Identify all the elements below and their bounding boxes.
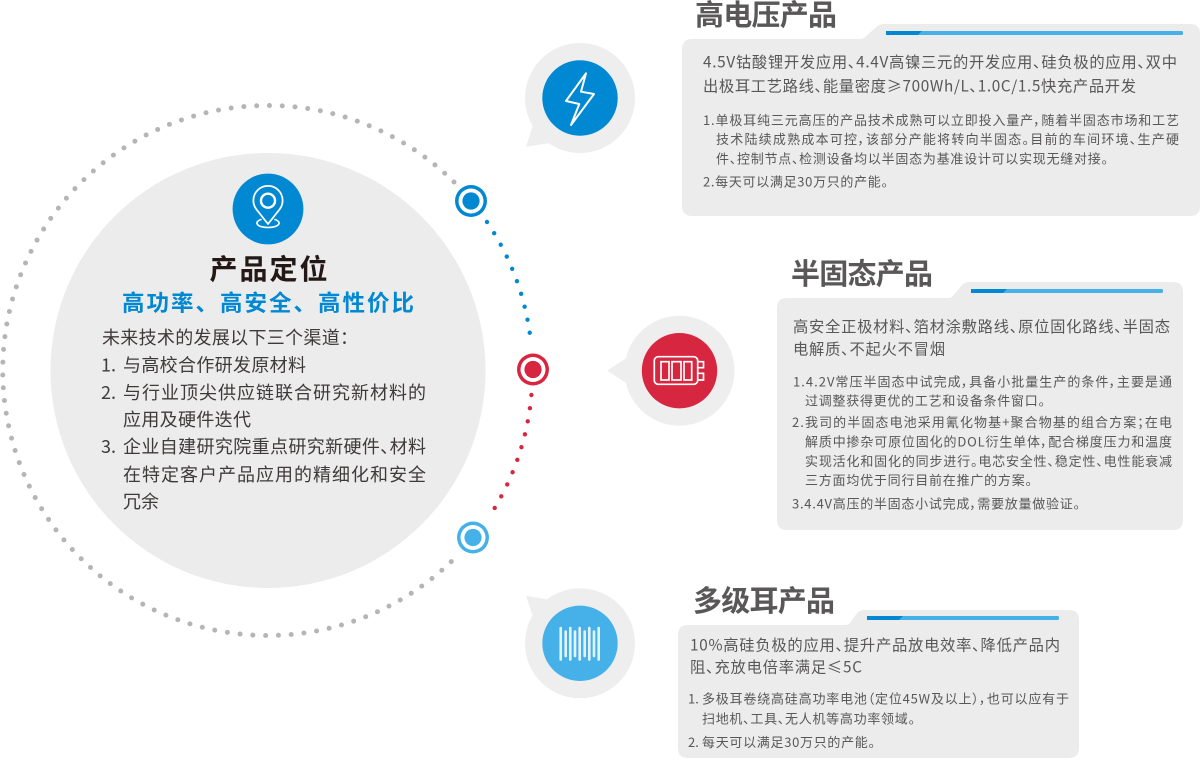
text: details: 多极耳卷绕高硅高功率电池（定位45W及以上），也可以应有于	[702, 688, 1069, 708]
text block: channels: 企业自建研究院重点研究新硬件、材料	[123, 433, 426, 459]
text block: channels: 与行业顶尖供应链联合研究新材料的	[123, 379, 426, 405]
node: blue	[455, 185, 487, 217]
text: details	[688, 688, 1069, 751]
text: summary: 出极耳工艺路线、能量密度≥700Wh/L、1.0C/1.5快充产品开发	[703, 74, 1136, 96]
text: details: 实现活化和固化的同步进行。电芯安全性、稳定性、电性能衰减	[805, 451, 1172, 470]
text block: channels: 与高校合作研发原材料	[123, 352, 306, 378]
text: details: 技术陆续成熟成本可控，该部分产能将转向半固态。目前的车间环境、生产硬	[716, 129, 1179, 148]
text: summary: 4.5V钴酸锂开发应用、4.4V高镍三元的开发应用、硅负极的应用、双中	[703, 50, 1177, 72]
node: light blue	[457, 522, 489, 554]
icon: battery bubble	[607, 316, 734, 426]
text block: channels: 冗余	[123, 488, 159, 514]
panel: semi-solid	[777, 282, 1183, 530]
node: red	[517, 354, 549, 386]
text: summary: 电解质、不起火不冒烟	[793, 338, 945, 360]
text: details: 3.4.4V高压的半固态小试完成，需要放量做验证。	[792, 494, 1080, 512]
panel: high voltage	[682, 24, 1200, 216]
text: summary: 高安全正极材料、箔材涂敷路线、原位固化路线、半固态	[793, 315, 1170, 337]
text: details: 2.我司的半固态电池采用氰化物基+聚合物基的组合方案；在电	[792, 412, 1172, 431]
text: details: 解质中掺杂可原位固化的DOL衍生单体，配合梯度压力和温度	[805, 432, 1172, 450]
text block: channels: 未来技术的发展以下三个渠道：	[102, 324, 349, 350]
text: details: 三方面均优于同行目前在推广的方案。	[805, 470, 1032, 489]
text: details: 2.	[688, 732, 699, 751]
text: details: 件、控制节点、检测设备均以半固态为基准设计可以实现无缝对接。	[716, 148, 1108, 168]
heading: 半固态产品: 半固态产品	[791, 251, 933, 293]
subheading: 高功率、高安全、高性价比	[122, 286, 414, 318]
text block: channels: 3.	[101, 433, 116, 459]
text: details: 1.	[688, 688, 699, 708]
text: details: 1.单极耳纯三元高压的产品技术成熟可以立即投入量产，随着半固态市场和工艺	[703, 110, 1179, 129]
text block: channels: 在特定客户产品应用的精细化和安全	[123, 461, 426, 487]
text: details: 扫地机、工具、无人机等高功率领域。	[702, 708, 915, 728]
text block: channels	[101, 324, 426, 514]
heading: 多级耳产品: 多级耳产品	[693, 578, 835, 620]
text: details	[792, 372, 1172, 512]
heading: 产品定位: 产品定位	[210, 248, 328, 288]
text: summary	[793, 315, 1170, 360]
text block: channels: 2.	[101, 379, 116, 405]
dotted ring	[3, 105, 531, 635]
text: details: 2.每天可以满足30万只的产能。	[703, 172, 888, 190]
text block: channels: 应用及硬件迭代	[123, 406, 251, 432]
icon: lightning bolt bubble	[525, 43, 635, 153]
text: details	[703, 110, 1179, 190]
text block: channels: 1.	[101, 352, 116, 378]
text: details: 过调整获得更优的工艺和设备条件窗口。	[805, 390, 1045, 410]
panel: product positioning	[50, 153, 486, 588]
icon: location pin	[233, 174, 303, 244]
text: details: 每天可以满足30万只的产能。	[702, 732, 875, 751]
icon: multi-tab bubble	[525, 588, 635, 698]
text: summary	[690, 634, 1060, 678]
text: summary	[703, 50, 1177, 96]
text: details: 1.4.2V常压半固态中试完成，具备小批量生产的条件，主要是通	[793, 372, 1172, 390]
text: summary: 10%高硅负极的应用、提升产品放电效率、降低产品内	[690, 634, 1060, 656]
text: summary: 阻、充放电倍率满足≤5C	[690, 656, 862, 678]
panel: multi-tab	[678, 610, 1079, 758]
